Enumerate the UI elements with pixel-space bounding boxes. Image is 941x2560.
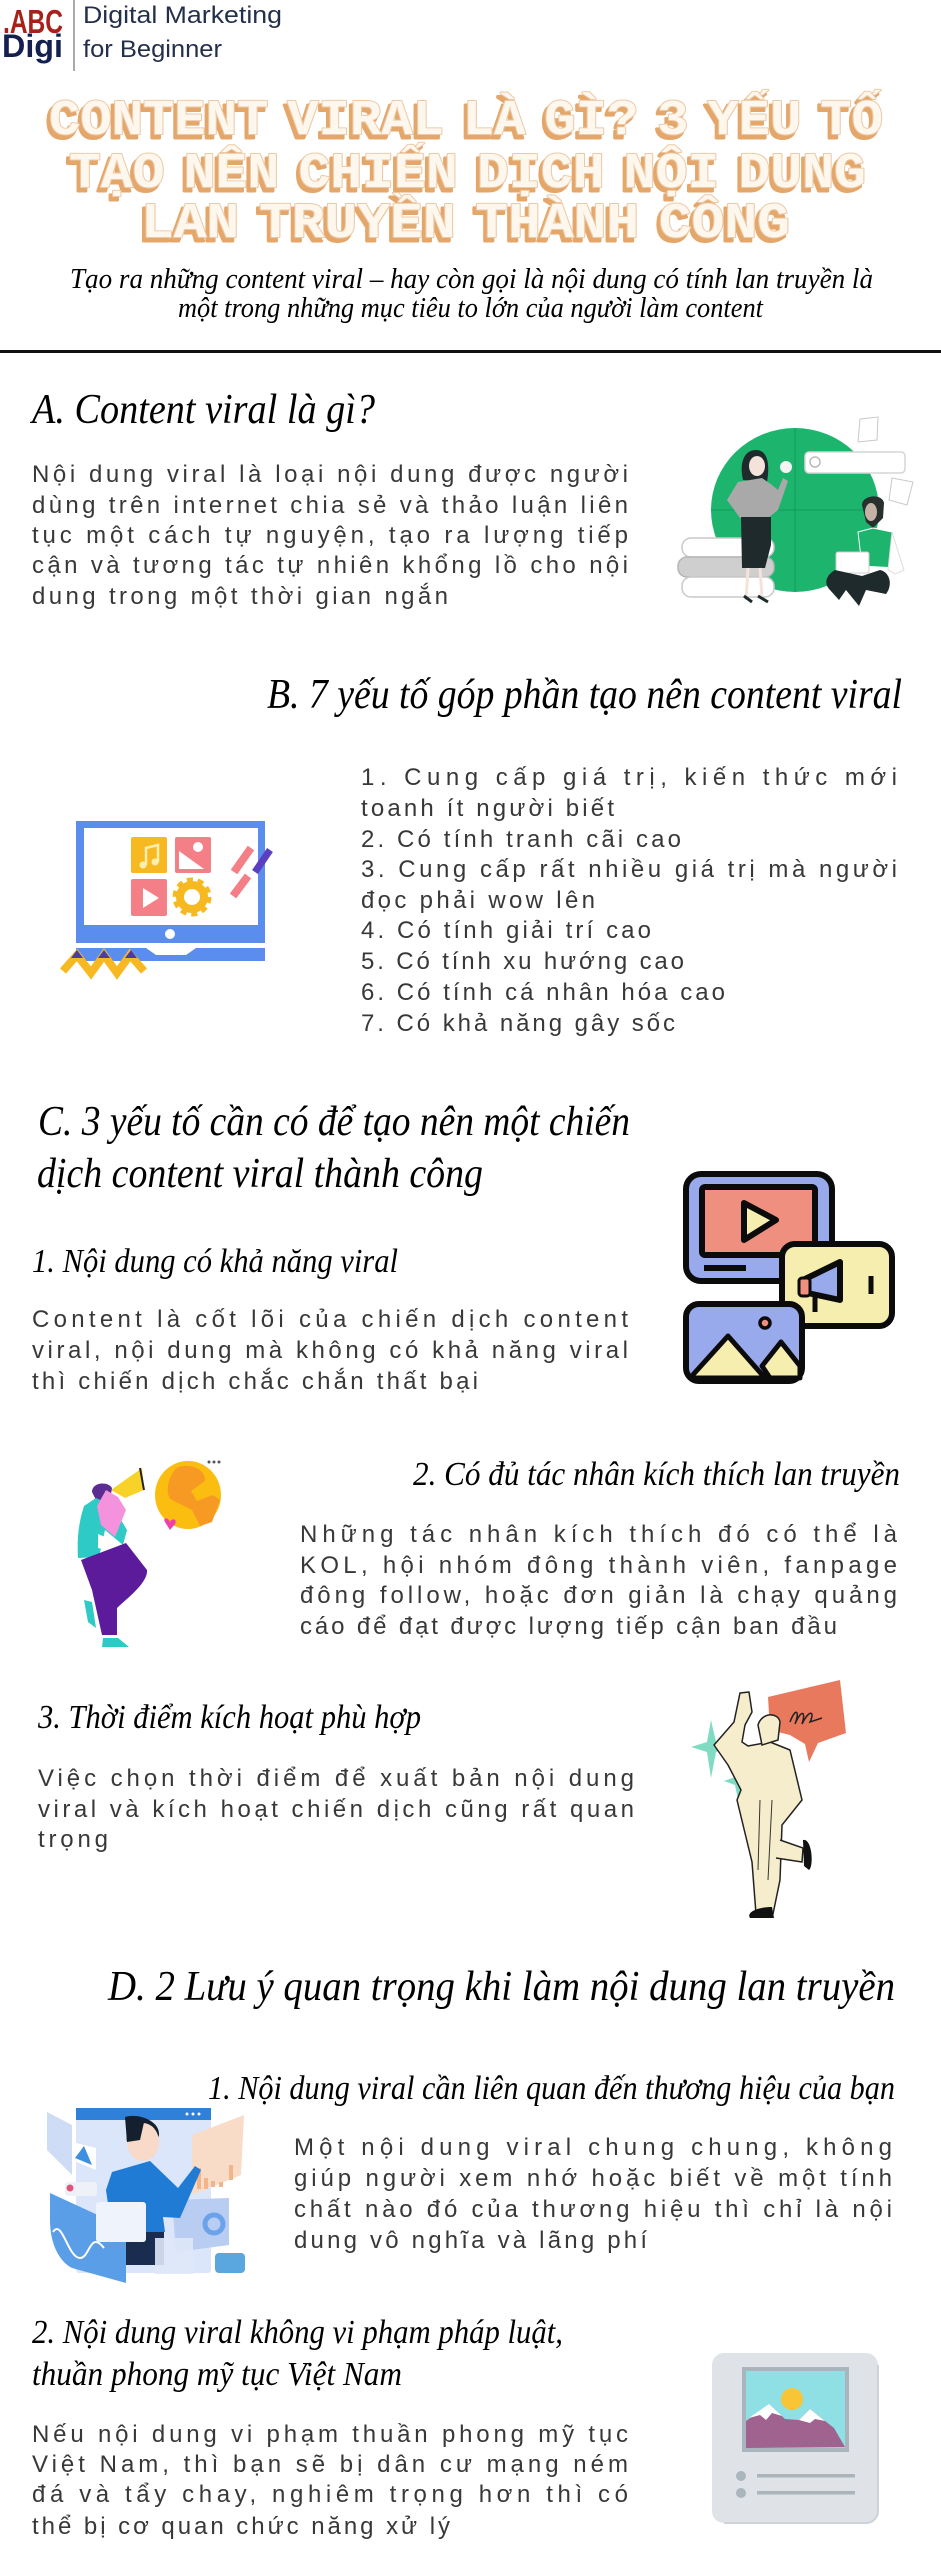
subheading C3: 3. Thời điểm kích hoạt phù hợp [37, 1699, 421, 1736]
title: LAN TRUYỀN THÀNH CÔNG [141, 193, 790, 253]
text block D2 [32, 2421, 628, 2540]
text block D1: dung vô nghĩa và lãng phí [294, 2227, 647, 2254]
text block D1: chất nào đó của thương hiệu thì chỉ là nội [294, 2196, 892, 2223]
text block C3 [38, 1765, 634, 1853]
title: TẠO NÊN CHIẾN DỊCH NỘI DUNG [69, 142, 866, 203]
icon: monitor with media tiles [63, 821, 270, 973]
logo: ABC Digi, Digital Marketing for Beginner: .ABC [3, 3, 63, 40]
list of 7 factors: 2. Có tính tranh cãi cao [361, 826, 681, 853]
list of 7 factors: 5. Có tính xu hướng cao [361, 948, 684, 975]
text block D1 [294, 2134, 892, 2254]
text block D2: thể bị cơ quan chức năng xử lý [32, 2513, 450, 2540]
list of 7 factors: 4. Có tính giải trí cao [361, 917, 651, 944]
illustration: woman and man with green globe [678, 417, 913, 606]
icon: photo card [712, 2353, 878, 2523]
text block A: tục một cách tự nguyện, tạo ra lượng tiếp [32, 522, 628, 549]
logo: ABC Digi, Digital Marketing for Beginner [2, 0, 282, 71]
heading C: dịch content viral thành công [37, 1151, 483, 1197]
text block C3: trọng [38, 1826, 108, 1853]
list of 7 factors: đọc phải wow lên [361, 887, 595, 914]
list of 7 factors [361, 764, 897, 1037]
subheading C2: 2. Có đủ tác nhân kích thích lan truyền [413, 1456, 900, 1493]
text block C2 [300, 1521, 898, 1640]
list of 7 factors: 3. Cung cấp rất nhiều giá trị mà người [361, 856, 897, 883]
text block C1 [32, 1306, 628, 1395]
panel: section C [32, 1099, 900, 1918]
subheading D2: 2. Nội dung viral không vi phạm pháp luật, [32, 2314, 563, 2351]
text block C1: Content là cốt lõi của chiến dịch content [32, 1306, 628, 1333]
logo: ABC Digi, Digital Marketing for Beginner: for Beginner [83, 36, 222, 63]
subheading D2 [32, 2314, 563, 2393]
text block C1: viral, nội dung mà không có khả năng viral [32, 1337, 628, 1364]
icon: video, megaphone and image cards [686, 1174, 892, 1381]
heading D: D. 2 Lưu ý quan trọng khi làm nội dung lan truyền [107, 1964, 895, 2010]
heading C: C. 3 yếu tố cần có để tạo nên một chiến [38, 1099, 630, 1145]
illustration: shouting man with speech bubble [691, 1680, 846, 1918]
text block A: dung trong một thời gian ngắn [32, 583, 448, 610]
subheading C1: 1. Nội dung có khả năng viral [32, 1243, 398, 1280]
title [46, 89, 883, 257]
subheading D2: thuần phong mỹ tục Việt Nam [32, 2356, 402, 2393]
logo: ABC Digi, Digital Marketing for Beginner: Digi [2, 28, 63, 64]
list of 7 factors: 6. Có tính cá nhân hóa cao [361, 979, 725, 1006]
text block D2: Nếu nội dung vi phạm thuần phong mỹ tục [32, 2421, 628, 2448]
subtitle [70, 263, 873, 324]
text block C2: đông follow, hoặc đơn giản là chạy quảng [300, 1582, 897, 1609]
panel: section B [63, 672, 902, 1037]
text block A [32, 461, 628, 610]
logo: ABC Digi, Digital Marketing for Beginner: Digital Marketing [83, 2, 282, 29]
list of 7 factors: 1. Cung cấp giá trị, kiến thức mới [361, 764, 897, 791]
list of 7 factors: toanh ít người biết [361, 795, 614, 822]
divider [0, 350, 941, 353]
text block D2: đá và tẩy chay, nghiêm trọng hơn thì có [32, 2481, 628, 2508]
text block D1: Một nội dung viral chung chung, không [294, 2134, 892, 2161]
text block C3: Việc chọn thời điểm để xuất bản nội dung [38, 1765, 634, 1792]
subtitle: Tạo ra những content viral – hay còn gọi là nội dung có tính lan truyền là [70, 263, 873, 295]
text block A: cận và tương tác tự nhiên khổng lồ cho nội [32, 552, 628, 579]
title: LAN TRUYỀN THÀNH CÔNG [138, 197, 787, 257]
heading A: A. Content viral là gì? [29, 387, 375, 433]
list of 7 factors: 7. Có khả năng gây sốc [361, 1010, 675, 1037]
title: CONTENT VIRAL LÀ GÌ? 3 YẾU TỐ [46, 93, 880, 154]
illustration: person at dashboard screens [47, 2108, 245, 2283]
panel: section A [29, 387, 913, 610]
title: TẠO NÊN CHIẾN DỊCH NỘI DUNG [66, 146, 863, 207]
text block C3: viral và kích hoạt chiến dịch cũng rất quan [38, 1796, 634, 1823]
text block C2: Những tác nhân kích thích đó có thể là [300, 1521, 898, 1548]
illustration: person with megaphone and orange globe [78, 1460, 221, 1647]
text block C2: cáo để đạt được lượng tiếp cận ban đầu [300, 1613, 837, 1640]
subtitle: một trong những mục tiêu to lớn của người làm content [178, 292, 764, 324]
text block D1: giúp người xem nhớ hoặc biết về một tính [294, 2165, 892, 2192]
text block C1: thì chiến dịch chắc chắn thất bại [32, 1368, 478, 1395]
panel: section D [32, 1964, 895, 2540]
heading C [37, 1099, 630, 1197]
text block D2: Việt Nam, thì bạn sẽ bị dân cư mạng ném [32, 2451, 628, 2478]
text block C2: KOL, hội nhóm đông thành viên, fanpage [300, 1552, 897, 1579]
text block A: Nội dung viral là loại nội dung được người [32, 461, 628, 488]
title: CONTENT VIRAL LÀ GÌ? 3 YẾU TỐ [49, 89, 883, 150]
text block A: dùng trên internet chia sẻ và thảo luận liên [32, 492, 628, 519]
